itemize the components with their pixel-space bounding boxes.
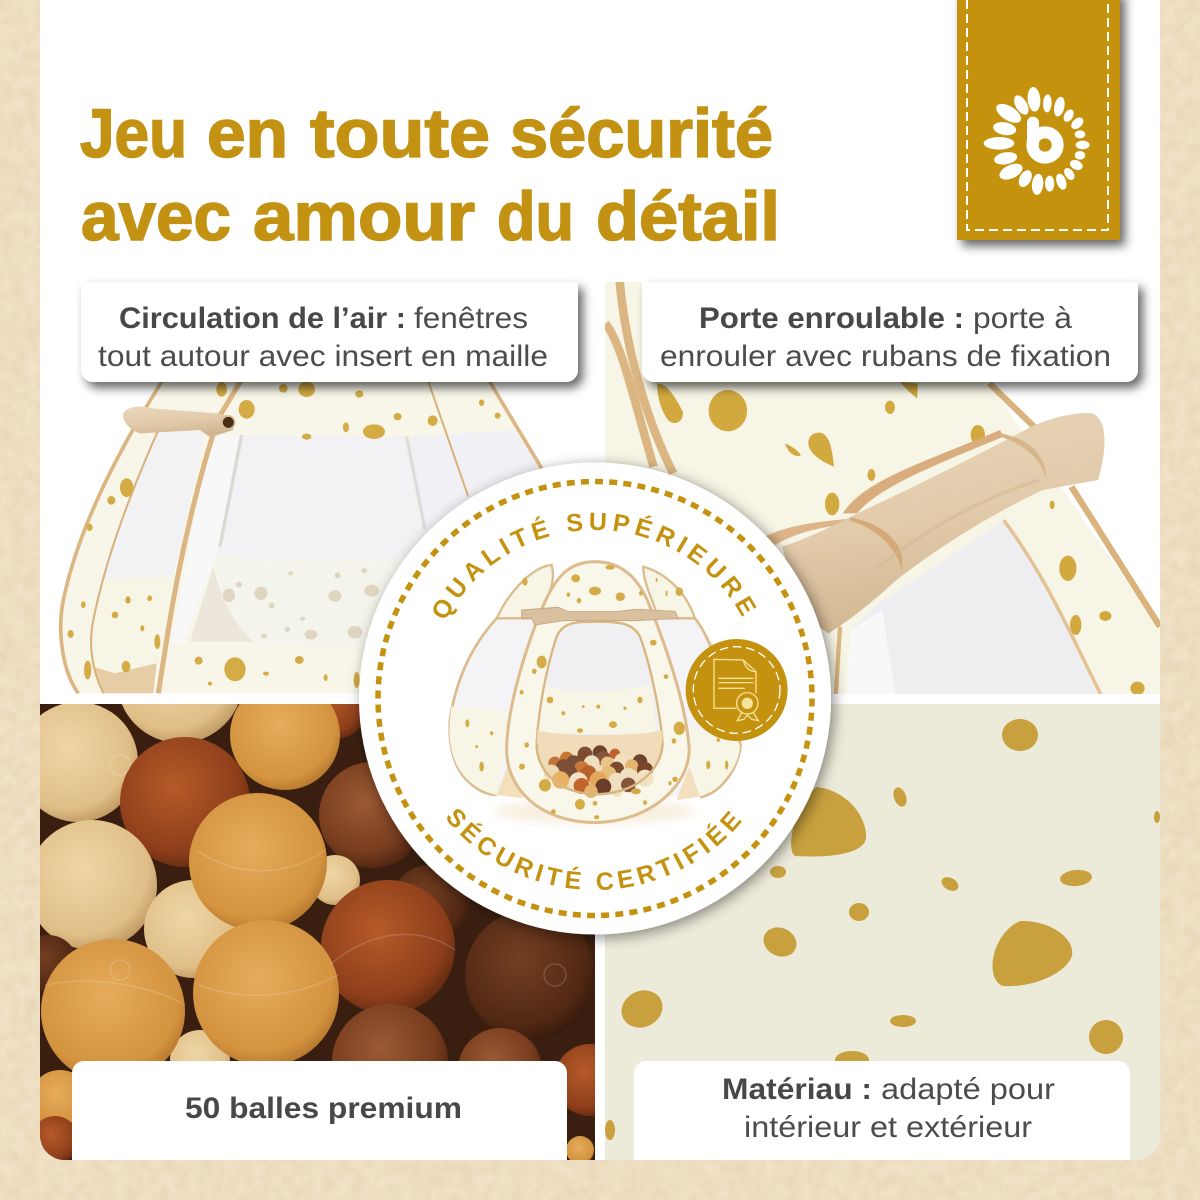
callout: roll-up door: Porte enroulable : [699,302,964,335]
icon: sunflower b logo [984,86,1090,196]
callout: roll-up door: porte à [973,302,1072,335]
title: en [207,95,288,172]
panel: ball pit photo [40,704,595,1160]
callout: roll-up door: enrouler avec rubans de fixation [660,340,1111,373]
balls [544,745,654,798]
title [80,95,780,255]
panel: roll-up door photo [605,277,1160,700]
callout: material: Matériau : [722,1073,872,1106]
title: amour [253,178,475,255]
title: toute [310,95,490,172]
title: Jeu [80,95,187,172]
callout: roll-up door [642,282,1138,382]
callout: material: adapté pour [881,1073,1055,1106]
callout: balls [72,1061,567,1160]
tent dots [465,565,728,819]
title: avec [81,178,231,255]
dots [68,382,501,688]
title: sécurité [510,95,773,172]
certificate badge [686,639,788,741]
callout: balls: 50 balles premium [185,1092,462,1125]
callout: air circulation: tout autour avec insert en maille [98,340,548,373]
callout: material: intérieur et extérieur [744,1111,1032,1144]
callout: air circulation: Circulation de l’air : [119,302,406,335]
callout: material [634,1061,1130,1160]
logo label [957,0,1120,240]
seal text bottom: SÉCURITÉ CERTIFIÉE [447,809,742,890]
highlights and seams [45,755,566,1005]
seal text top: QUALITÉ SUPÉRIEURE [433,512,756,618]
panel: fabric material photo [605,704,1160,1160]
product tent [450,562,741,823]
panel: air circulation tent photo [61,377,543,693]
title: détail [596,178,780,255]
callout: air circulation: fenêtres [414,302,528,335]
title: du [497,178,574,255]
quality seal [352,456,844,947]
callout: air circulation [81,282,578,382]
